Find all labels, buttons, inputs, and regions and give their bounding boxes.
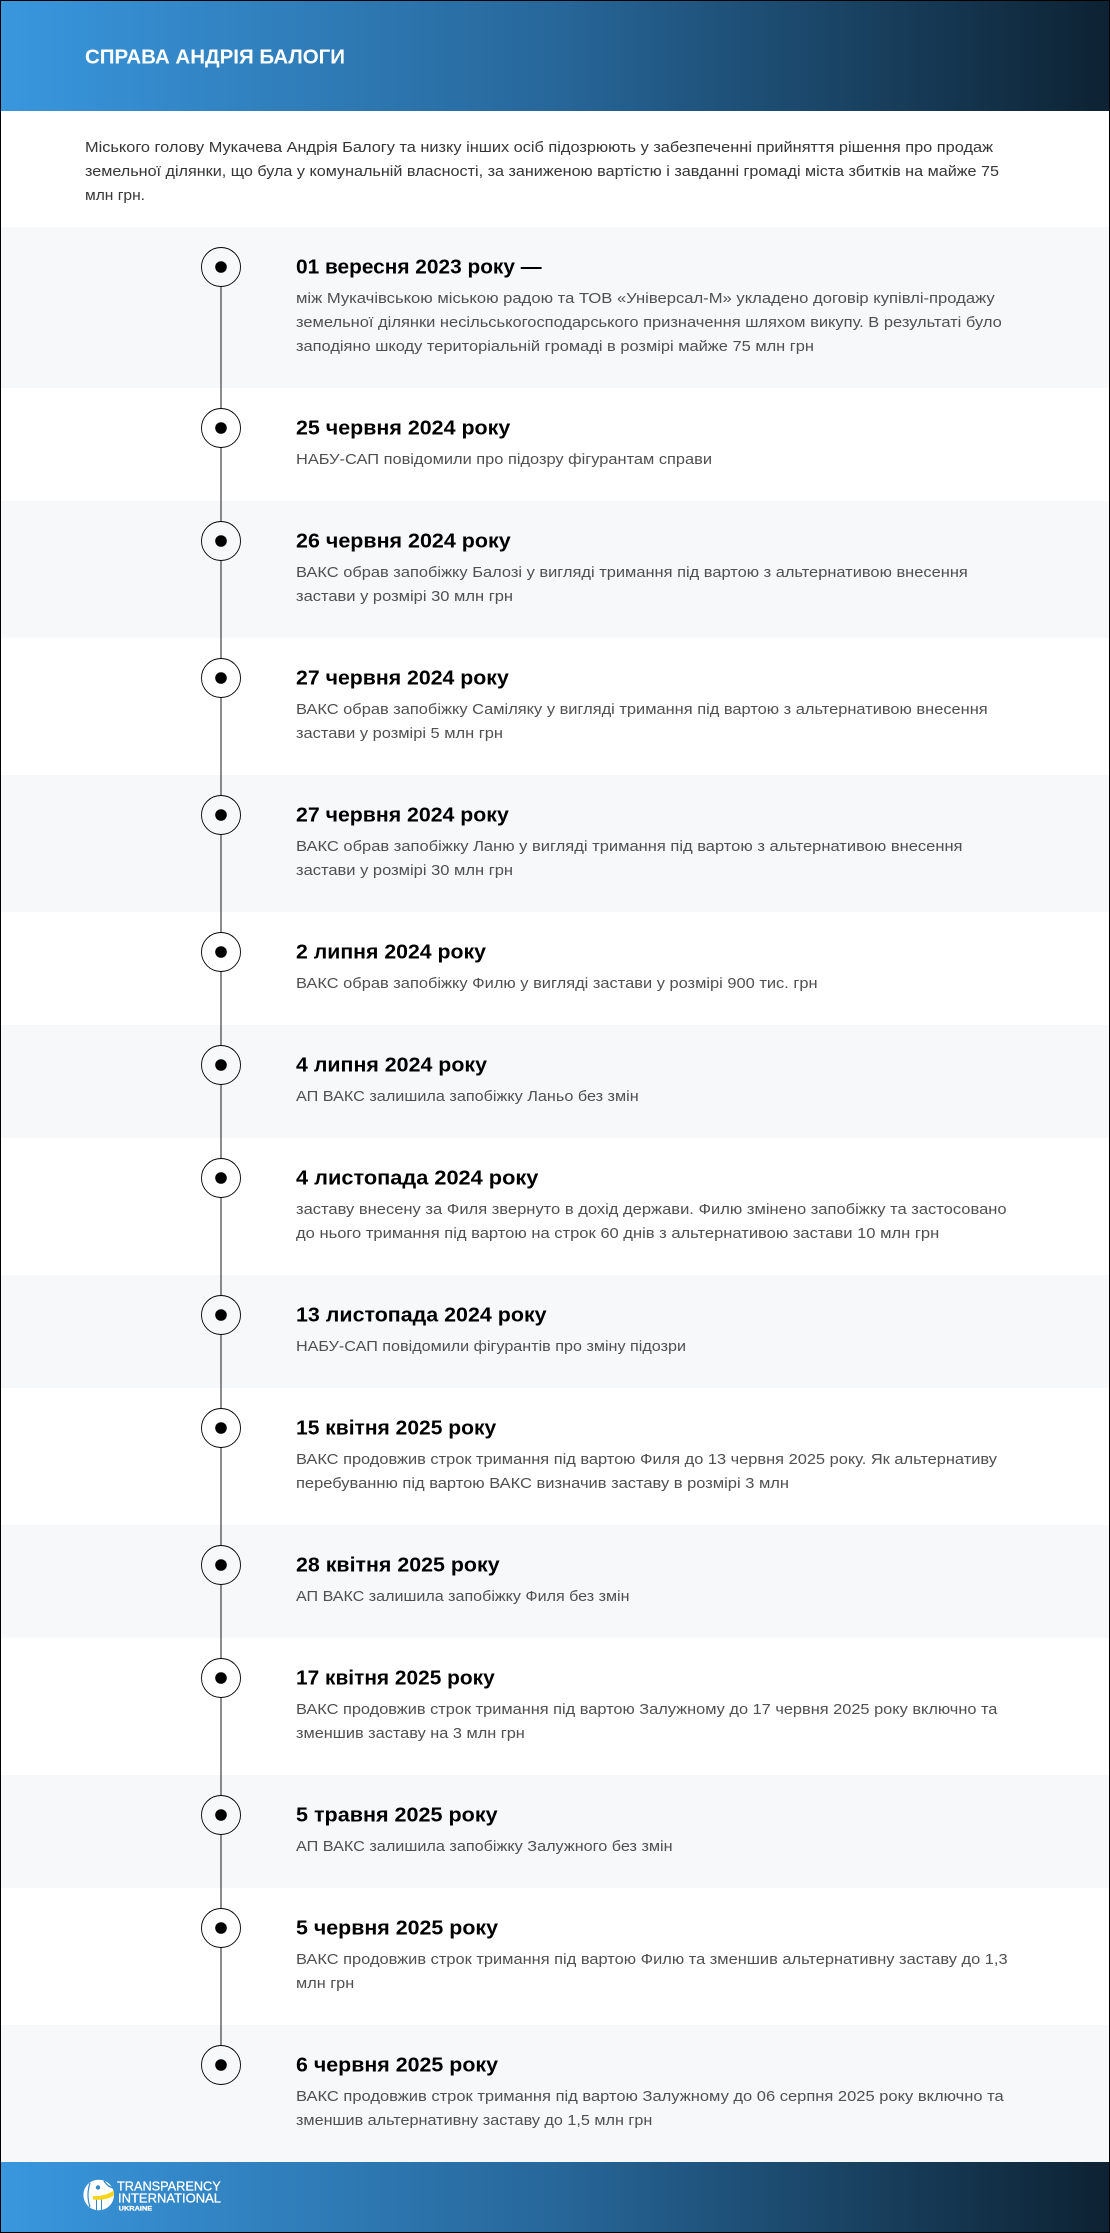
row: 13 листопада 2024: [0, 1275, 1110, 1388]
row: 28 квітня 2025: 28 квітня 2025 року: [296, 1554, 501, 1576]
row: 01 вересня 2023: земельної ділянки несільськогосподарського призначення шляхом викупу. В результаті було: [296, 314, 1002, 331]
row: 26 червня 2024: 26 червня 2024 року: [296, 530, 512, 552]
logo wordmark: [117, 2180, 221, 2213]
row: 17 квітня 2025: зменшив заставу на 3 млн грн: [296, 1725, 525, 1742]
row: 27 червня 2024 (Лань): застави у розмірі 30 млн грн: [296, 862, 513, 879]
logo wordmark: UKRAINE: [119, 2206, 152, 2213]
row: 01 вересня 2023: між Мукачівською міською радою та ТОВ «Універсал-М» укладено договір купівлі-продажу: [296, 290, 995, 307]
row: 5 червня 2025: [296, 1918, 1008, 1992]
row: 4 листопада 2024: [296, 1168, 1007, 1242]
row: 27 червня 2024 (Саміляк): застави у розмірі 5 млн грн: [296, 725, 503, 742]
row: 5 травня 2025: АП ВАКС залишила запобіжку Залужного без змін: [296, 1838, 673, 1855]
title: СПРАВА АНДРІЯ БАЛОГИ: [85, 46, 345, 68]
row: 5 травня 2025: [0, 1775, 1110, 1888]
row: 4 листопада 2024: заставу внесену за Филя звернуто в дохід держави. Филю змінено запобіжку та застосовано: [296, 1201, 1007, 1218]
row: 01 вересня 2023: 01 вересня 2023 року —: [296, 256, 542, 278]
row: 17 квітня 2025: 17 квітня 2025 року: [296, 1668, 496, 1690]
row: 15 квітня 2025: [296, 1418, 997, 1492]
row: 15 квітня 2025: перебуванню під вартою ВАКС визначив заставу в розмірі 3 млн: [296, 1475, 789, 1492]
intro text block: Міського голову Мукачева Андрія Балогу та низку інших осіб підозрюють у забезпеченні прийняття рішення про продаж: [85, 139, 993, 156]
row: 5 червня 2025: ВАКС продовжив строк тримання під вартою Филю та зменшив альтернативну заставу до 1,3: [296, 1951, 1008, 1968]
row: 27 червня 2024 (Лань): ВАКС обрав запобіжку Ланю у вигляді тримання під вартою з альтернативою внесення: [296, 838, 962, 855]
row: 2 липня 2024: 2 липня 2024 року: [296, 942, 487, 964]
row: 6 червня 2025: зменшив альтернативну заставу до 1,5 млн грн: [296, 2112, 652, 2129]
row: 6 червня 2025: [0, 2025, 1110, 2162]
row: 5 червня 2025: 5 червня 2025 року: [296, 1918, 499, 1940]
row: 01 вересня 2023: заподіяно шкоду територіальній громаді в розмірі майже 75 млн грн: [296, 338, 814, 355]
row: 4 листопада 2024: до нього тримання під вартою на строк 60 днів з альтернативою застави 10 млн грн: [296, 1225, 939, 1242]
header banner: [0, 0, 1110, 111]
row: 13 листопада 2024: НАБУ-САП повідомили фігурантів про зміну підозри: [296, 1338, 686, 1355]
timeline line and markers: [202, 248, 240, 2084]
row: 6 червня 2025: 6 червня 2025 року: [296, 2054, 499, 2076]
row: 27 червня 2024 (Лань): [0, 775, 1110, 912]
row: 17 квітня 2025: [296, 1668, 998, 1742]
row: 4 липня 2024: [0, 1025, 1110, 1138]
intro text block: земельної ділянки, що була у комунальній власності, за заниженою вартістю і завданні громаді міста збитків на майже 75: [85, 163, 999, 180]
row: 27 червня 2024 (Саміляк): 27 червня 2024 року: [296, 668, 510, 690]
row: 27 червня 2024 (Саміляк): ВАКС обрав запобіжку Саміляку у вигляді тримання під вартою з альтернативою внесення: [296, 701, 988, 718]
row: 15 квітня 2025: ВАКС продовжив строк тримання під вартою Филя до 13 червня 2025 року. Як альтернативу: [296, 1451, 997, 1468]
icon: Transparency International logo mark: [83, 2180, 114, 2210]
row: 26 червня 2024: [0, 501, 1110, 638]
row: 27 червня 2024 (Лань): 27 червня 2024 року: [296, 804, 510, 826]
logo wordmark: TRANSPARENCY: [117, 2180, 221, 2194]
row: 4 липня 2024: АП ВАКС залишила запобіжку Ланьо без змін: [296, 1088, 639, 1105]
row: 13 листопада 2024: 13 листопада 2024 року: [296, 1304, 548, 1326]
row: 2 липня 2024: ВАКС обрав запобіжку Филю у вигляді застави у розмірі 900 тис. грн: [296, 975, 818, 992]
row: 27 червня 2024 (Саміляк): [296, 668, 988, 742]
row: 17 квітня 2025: ВАКС продовжив строк тримання під вартою Залужному до 17 червня 2025 року включно та: [296, 1701, 998, 1718]
row: 4 липня 2024: 4 липня 2024 року: [296, 1054, 488, 1076]
row: 25 червня 2024: [296, 418, 712, 468]
intro text block: млн грн.: [85, 187, 145, 204]
row: 25 червня 2024: НАБУ-САП повідомили про підозру фігурантам справи: [296, 451, 712, 468]
row: 26 червня 2024: застави у розмірі 30 млн грн: [296, 588, 513, 605]
row: 5 травня 2025: 5 травня 2025 року: [296, 1804, 499, 1826]
row: 6 червня 2025: ВАКС продовжив строк тримання під вартою Залужному до 06 серпня 2025 року включно та: [296, 2088, 1004, 2105]
row: 4 листопада 2024: 4 листопада 2024 року: [296, 1168, 539, 1190]
row: 25 червня 2024: 25 червня 2024 року: [296, 418, 511, 440]
row: 15 квітня 2025: 15 квітня 2025 року: [296, 1418, 497, 1440]
row: 2 липня 2024: [296, 942, 818, 992]
logo wordmark: INTERNATIONAL: [118, 2192, 221, 2206]
intro text block: [85, 139, 999, 204]
row: 5 червня 2025: млн грн: [296, 1975, 354, 1992]
row: 01 вересня 2023: [0, 227, 1110, 388]
row: 28 квітня 2025: [0, 1525, 1110, 1638]
footer banner: [0, 2162, 1110, 2233]
row: 28 квітня 2025: АП ВАКС залишила запобіжку Филя без змін: [296, 1588, 630, 1605]
row: 26 червня 2024: ВАКС обрав запобіжку Балозі у вигляді тримання під вартою з альтернативою внесення: [296, 564, 968, 581]
